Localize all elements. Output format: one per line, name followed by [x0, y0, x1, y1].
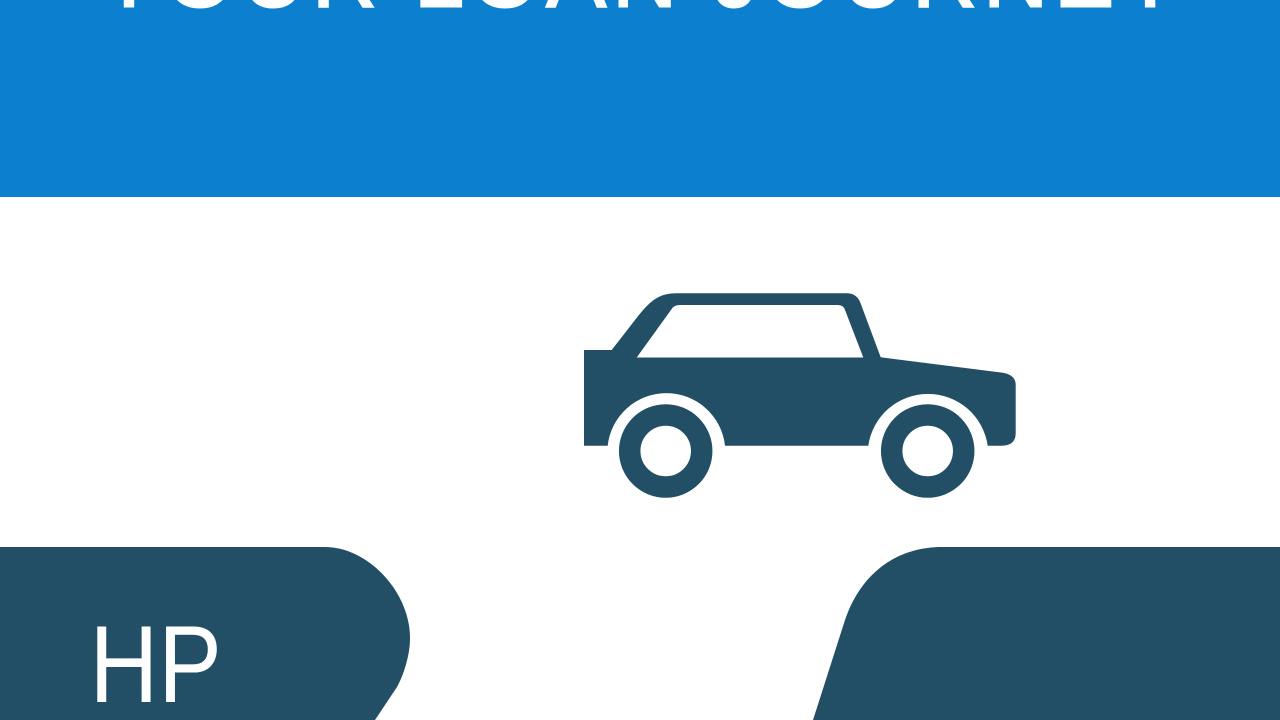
rear wheel — [630, 415, 702, 487]
panel: HP — [0, 547, 410, 720]
header band — [0, 0, 1280, 197]
icon: car — [584, 293, 1016, 487]
panel: right — [813, 547, 1280, 720]
front wheel — [892, 415, 964, 487]
